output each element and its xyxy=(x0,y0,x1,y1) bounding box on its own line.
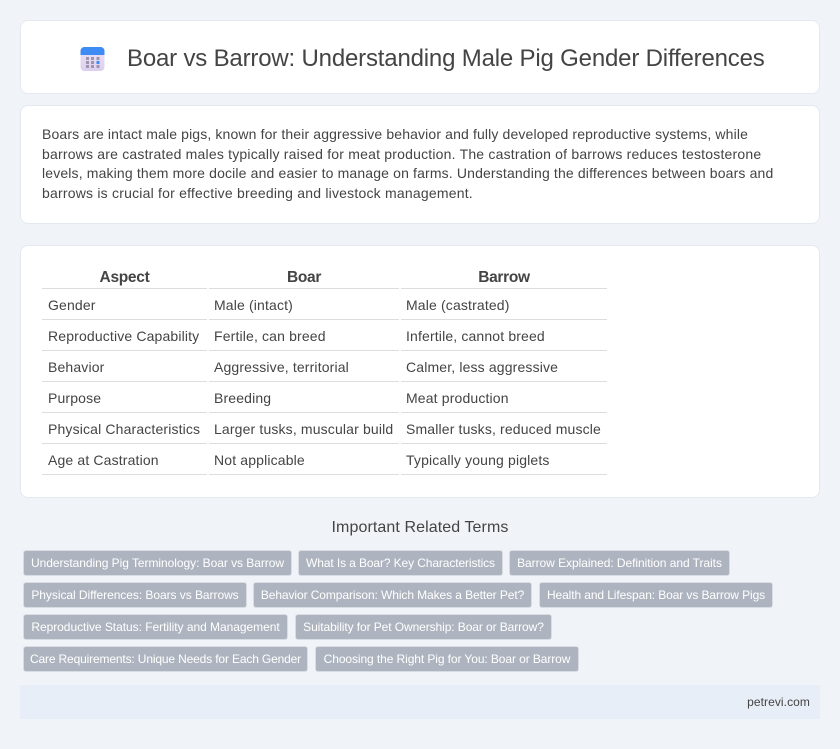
row: gender xyxy=(48,297,510,313)
row: reproductive capability: Fertile, can breed xyxy=(214,328,326,344)
row: reproductive capability: Infertile, cannot breed xyxy=(406,328,545,344)
row: gender: Gender xyxy=(48,297,96,313)
tag: Choosing the Right Pig for You: Boar or Barrow xyxy=(324,652,570,666)
row: physical characteristics xyxy=(48,421,601,437)
tag xyxy=(23,614,288,640)
tag: Physical Differences: Boars vs Barrows xyxy=(31,588,239,602)
intro text: levels, making them more docile and easier to manage on farms. Understanding the differences between boars and xyxy=(42,165,773,181)
row: age at castration xyxy=(48,452,550,468)
tag: Behavior Comparison: Which Makes a Better Pet? xyxy=(261,588,524,602)
table header xyxy=(100,269,530,286)
tag xyxy=(23,550,292,576)
intro text xyxy=(42,126,773,201)
row: purpose xyxy=(48,390,509,406)
tag xyxy=(315,646,579,672)
tag: Health and Lifespan: Boar vs Barrow Pigs xyxy=(547,588,765,602)
tag: Suitability for Pet Ownership: Boar or Barrow? xyxy=(303,620,544,634)
footer xyxy=(20,685,820,719)
table header: Boar xyxy=(287,269,321,286)
row: age at castration: Age at Castration xyxy=(48,452,159,468)
row: purpose: Breeding xyxy=(214,390,271,406)
row: gender: Male (castrated) xyxy=(406,297,510,313)
tag xyxy=(23,646,308,672)
tag: Care Requirements: Unique Needs for Each Gender xyxy=(30,652,301,666)
icon: calendar xyxy=(80,47,104,71)
tag: Reproductive Status: Fertility and Management xyxy=(31,620,280,634)
footer source: petrevi.com xyxy=(747,695,810,709)
row: physical characteristics: Smaller tusks, reduced muscle xyxy=(406,421,601,437)
tag: Understanding Pig Terminology: Boar vs Barrow xyxy=(31,556,284,570)
panel: introduction xyxy=(20,105,820,224)
tag xyxy=(253,582,532,608)
intro text: barrows are castrated males typically raised for meat production. The castration of barrows reduces testosterone xyxy=(42,146,761,162)
tag: Barrow Explained: Definition and Traits xyxy=(517,556,722,570)
row: physical characteristics: Physical Characteristics xyxy=(48,421,200,437)
row: age at castration: Typically young piglets xyxy=(406,452,550,468)
row: reproductive capability xyxy=(48,328,545,344)
row: behavior xyxy=(48,359,558,375)
row: gender: Male (intact) xyxy=(214,297,293,313)
row: behavior: Aggressive, territorial xyxy=(214,359,349,375)
row: physical characteristics: Larger tusks, muscular build xyxy=(214,421,393,437)
tag list xyxy=(23,550,773,672)
row: behavior: Behavior xyxy=(48,359,104,375)
heading: related terms: Important Related Terms xyxy=(332,519,508,536)
row: purpose: Meat production xyxy=(406,390,509,406)
panel: comparison table xyxy=(20,245,820,498)
row: reproductive capability: Reproductive Capability xyxy=(48,328,199,344)
tag xyxy=(539,582,773,608)
tag: What Is a Boar? Key Characteristics xyxy=(306,556,495,570)
title: Boar vs Barrow: Understanding Male Pig Gender Differences xyxy=(127,45,765,72)
table header: Aspect xyxy=(100,269,149,286)
tag xyxy=(23,582,247,608)
row: age at castration: Not applicable xyxy=(214,452,305,468)
tag xyxy=(509,550,730,576)
intro text: barrows is crucial for effective breeding and livestock management. xyxy=(42,184,473,200)
table header: Barrow xyxy=(478,269,530,286)
intro text: Boars are intact male pigs, known for their aggressive behavior and fully developed reproductive systems, while xyxy=(42,126,748,142)
row: purpose: Purpose xyxy=(48,390,101,406)
tag xyxy=(295,614,552,640)
tag xyxy=(298,550,503,576)
panel: header xyxy=(20,20,820,94)
row: behavior: Calmer, less aggressive xyxy=(406,359,558,375)
